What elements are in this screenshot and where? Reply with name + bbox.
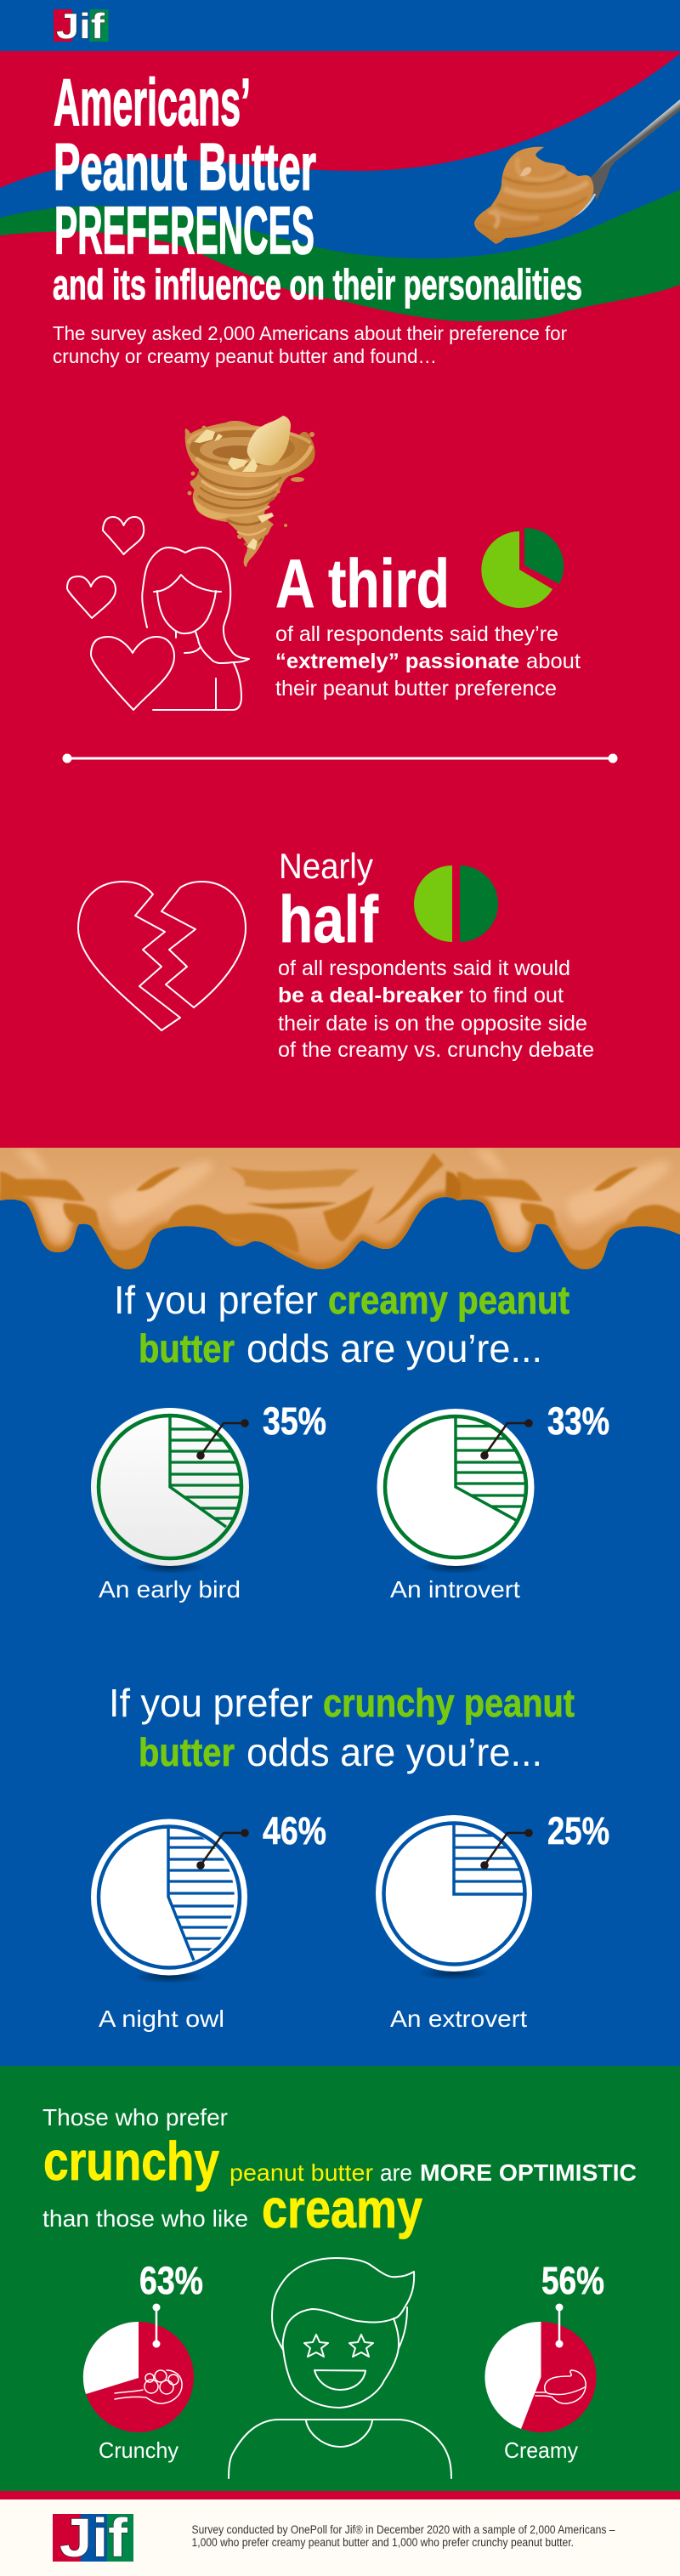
value: 33%: 33% bbox=[547, 1399, 609, 1443]
heading: crunchy: butter bbox=[139, 1730, 235, 1774]
value: 35%: 35% bbox=[263, 1399, 326, 1443]
header bar bbox=[0, 0, 680, 51]
text: a third description: about bbox=[526, 650, 581, 673]
panel: red background bbox=[0, 51, 680, 1148]
intro text: The survey asked 2,000 Americans about their preference for bbox=[53, 322, 567, 344]
icon: woman body bbox=[153, 663, 241, 710]
icon: broken heart bbox=[78, 882, 246, 1030]
value: 25%: 25% bbox=[547, 1809, 609, 1853]
footnote bbox=[192, 2523, 615, 2549]
icon: heart large bbox=[91, 637, 174, 710]
text: half description: be a deal-breaker bbox=[278, 984, 463, 1007]
chart: introvert 33% bbox=[377, 1399, 609, 1603]
icon: shoulders bbox=[229, 2420, 451, 2478]
stat: nearly half: Nearly bbox=[279, 846, 373, 886]
value: 46%: 46% bbox=[263, 1809, 326, 1853]
icon: star eye left bbox=[304, 2335, 328, 2357]
pie chart: one third bbox=[481, 528, 564, 608]
heading: creamy bbox=[114, 1278, 570, 1370]
panel: blue background bbox=[0, 1148, 680, 2066]
stat: a third: A third bbox=[275, 546, 450, 622]
text: half description: to find out bbox=[469, 984, 564, 1007]
icon: star eye right bbox=[349, 2335, 373, 2357]
text: half description: of all respondents said it would bbox=[278, 956, 570, 980]
heading: crunchy: If you prefer bbox=[109, 1681, 313, 1725]
icon: smile bbox=[314, 2370, 366, 2390]
title: Americans’ bbox=[54, 65, 251, 139]
text: half description bbox=[278, 956, 594, 1062]
label: night owl: A night owl bbox=[99, 2006, 224, 2032]
illustration: smiling man bbox=[229, 2258, 451, 2478]
illustration: woman with hearts bbox=[67, 517, 249, 710]
stat: nearly half: half bbox=[279, 882, 379, 956]
text: half description: of the creamy vs. crunchy debate bbox=[278, 1038, 594, 1062]
panel: green background bbox=[0, 2066, 680, 2491]
heading: optimism bbox=[42, 2104, 637, 2239]
heading: optimism: crunchy bbox=[43, 2131, 219, 2192]
value: 56%: 56% bbox=[541, 2259, 604, 2302]
icon: heart middle bbox=[67, 576, 116, 618]
label: introvert: An introvert bbox=[390, 1576, 520, 1603]
chart: early bird 35% bbox=[91, 1399, 326, 1603]
footnote: 1,000 who prefer creamy peanut butter and 1,000 who prefer crunchy peanut butter. bbox=[192, 2536, 574, 2549]
pie chart: half bbox=[414, 865, 498, 942]
text: a third description: of all respondents said they’re bbox=[275, 622, 558, 646]
text: a third description: “extremely” passionate bbox=[275, 650, 519, 673]
heading: optimism: peanut butter bbox=[230, 2159, 373, 2186]
heading: creamy: odds are you’re... bbox=[246, 1326, 542, 1370]
heading: crunchy: crunchy peanut bbox=[323, 1681, 575, 1725]
title: Peanut Butter bbox=[54, 129, 316, 204]
heading: optimism: MORE OPTIMISTIC bbox=[420, 2159, 637, 2186]
icon: half peanut bbox=[194, 497, 230, 519]
stat: a third bbox=[275, 528, 581, 701]
icon: crunchy spoon bbox=[115, 2370, 182, 2403]
logo: Jif top: Jif bbox=[56, 6, 105, 46]
wave banner bbox=[0, 54, 680, 374]
illustration: peanut butter tornado bbox=[185, 416, 314, 567]
value: 63%: 63% bbox=[139, 2259, 203, 2302]
text: a third description bbox=[275, 622, 581, 701]
title bbox=[53, 65, 582, 309]
heading: creamy: butter bbox=[139, 1326, 235, 1370]
illustration: peanut butter drips bbox=[0, 1148, 680, 1275]
label: extrovert: An extrovert bbox=[390, 2006, 527, 2032]
chart: crunchy 63% bbox=[83, 2259, 203, 2463]
chart: creamy 56% bbox=[484, 2259, 604, 2463]
text: half description: their date is on the opposite side bbox=[278, 1012, 587, 1036]
intro text bbox=[53, 322, 567, 367]
label: creamy: Creamy bbox=[504, 2437, 578, 2463]
logo: Jif bottom: Jif bbox=[60, 2507, 128, 2568]
icon: woman face bbox=[154, 575, 221, 653]
heading: optimism: Those who prefer bbox=[42, 2104, 228, 2131]
footer band bbox=[0, 2491, 680, 2576]
intro text: crunchy or creamy peanut butter and found… bbox=[53, 345, 437, 367]
heading: crunchy bbox=[109, 1681, 575, 1774]
label: early bird: An early bird bbox=[99, 1576, 241, 1603]
heading: creamy: creamy peanut bbox=[328, 1278, 570, 1322]
heading: optimism: than those who like bbox=[42, 2205, 248, 2232]
label: crunchy: Crunchy bbox=[99, 2437, 178, 2463]
heading: creamy: If you prefer bbox=[114, 1278, 318, 1322]
illustration: spoon with peanut butter bbox=[474, 99, 680, 244]
heading: crunchy: odds are you’re... bbox=[246, 1730, 542, 1774]
heading: optimism: creamy bbox=[262, 2178, 422, 2239]
icon: whole peanut bbox=[247, 416, 291, 466]
icon: heart top bbox=[103, 517, 144, 554]
chart: extrovert 25% bbox=[376, 1809, 609, 2032]
stat: nearly half bbox=[278, 846, 594, 1062]
icon: creamy spoon bbox=[536, 2370, 586, 2403]
heading: optimism: are bbox=[380, 2159, 412, 2186]
footnote: Survey conducted by OnePoll for Jif® in December 2020 with a sample of 2,000 Americans – bbox=[192, 2523, 615, 2536]
chart: night owl 46% bbox=[91, 1809, 326, 2032]
divider with end dots bbox=[63, 753, 617, 763]
icon: woman hair bbox=[142, 548, 249, 663]
text: a third description: their peanut butter preference bbox=[275, 677, 557, 701]
title: PREFERENCES bbox=[54, 192, 314, 268]
